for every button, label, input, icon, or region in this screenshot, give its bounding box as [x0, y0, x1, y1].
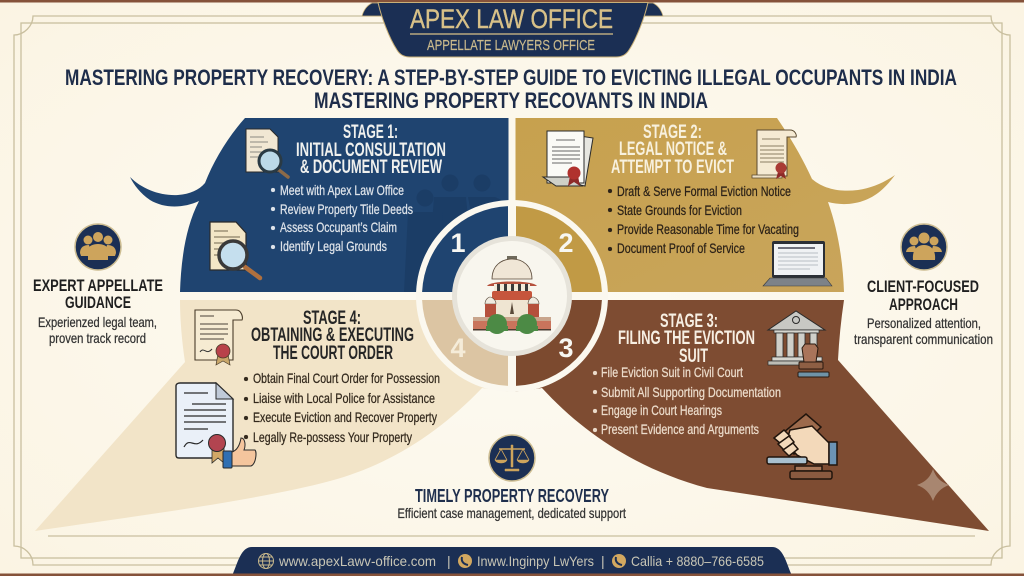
footer contact bar [233, 547, 791, 574]
stage 2 bullets: Document Proof of Service [617, 240, 745, 256]
icon: supreme court building [473, 256, 551, 334]
stage 2 heading: ATTEMPT TO EVICT [611, 157, 734, 178]
panel: stage 3 shape [516, 300, 989, 531]
icon: scroll notice (stage 2) [752, 130, 796, 179]
icon: stamp (stage 3) [798, 344, 829, 377]
stage 2 bullets: State Grounds for Eviction [617, 202, 742, 218]
stage 1 bullets: Review Property Title Deeds [280, 201, 413, 217]
icon: thumbs up (stage 4) [223, 438, 256, 468]
stage 2 heading: LEGAL NOTICE & [619, 139, 727, 160]
icon: globe [258, 554, 274, 568]
stage 4 bullets [244, 370, 440, 445]
stage 4 heading: OBTAINING & EXECUTING [251, 325, 414, 346]
title: MASTERING PROPERTY RECOVANTS IN INDIA [314, 88, 708, 113]
description: transparent communication [854, 331, 993, 347]
panel: stage 4 shape [35, 300, 508, 531]
stage 3 heading [618, 311, 755, 367]
stage 2 heading: STAGE 2: [643, 122, 702, 143]
stage 2 bullets: Provide Reasonable Time for Vacating [617, 221, 799, 237]
stage 3 bullets [593, 364, 781, 437]
stage 2 heading [611, 122, 734, 178]
description [38, 314, 157, 346]
panel: stage 1 shape [130, 118, 508, 292]
stage 4 heading [251, 308, 414, 364]
stage 3 text [593, 311, 781, 437]
stage 4 text [244, 308, 440, 445]
stage 1 bullets: Meet with Apex Law Office [280, 182, 404, 198]
icon: scales of justice [489, 435, 535, 481]
stage 2 bullets [608, 183, 799, 256]
stage 1 text [271, 122, 446, 254]
stage 1 bullets [271, 182, 413, 254]
icon: laptop (stage 2) [763, 241, 832, 286]
silhouette: legal team [404, 174, 508, 292]
icon: phone [612, 554, 626, 568]
icon: document with magnifier (stage 1 top) [246, 129, 288, 177]
heading [33, 276, 163, 312]
description: Personalized attention, [867, 315, 981, 331]
icon: sparkle [917, 469, 949, 501]
stage 2 text [608, 122, 799, 256]
stage 4 bullets: Execute Eviction and Recover Property [253, 409, 437, 425]
stage 4 bullets: Liaise with Local Police for Assistance [253, 390, 435, 406]
heading: CLIENT-FOCUSED [867, 277, 979, 296]
stage 1 bullets: Assess Occupant’s Claim [280, 219, 397, 235]
stage 4 bullets: Obtain Final Court Order for Possession [253, 370, 440, 386]
stage 1 heading [296, 122, 446, 178]
stage 4 bullets: Legally Re-possess Your Property [253, 429, 412, 445]
office name: APEX LAW OFFICE [410, 4, 613, 34]
icon: certificate scroll (stage 4) [195, 310, 242, 365]
callout: expert appellate guidance [33, 224, 163, 346]
number 2: 2 [558, 228, 574, 258]
number 3: 3 [558, 333, 574, 363]
description [854, 315, 993, 347]
heading [867, 277, 979, 314]
number 1: 1 [450, 228, 466, 258]
icon: courthouse (stage 3) [768, 311, 825, 365]
description: Efficient case management, dedicated support [398, 505, 626, 521]
icon: phone [458, 554, 472, 568]
stage 1 bullets: Identify Legal Grounds [280, 238, 387, 254]
number 4: 4 [450, 333, 466, 363]
stage 3 bullets: Present Evidence and Arguments [601, 421, 759, 437]
banner shape [378, 2, 648, 57]
title [65, 65, 957, 113]
office subtitle: APPELLATE LAWYERS OFFICE [427, 37, 595, 54]
panel: stage 2 shape [516, 118, 895, 292]
stage 1 heading: INITIAL CONSULTATION [296, 140, 446, 161]
heading: APPROACH [889, 295, 958, 314]
stage 3 bullets: Submit All Supporting Documentation [601, 384, 781, 400]
stage 3 heading: STAGE 3: [660, 311, 718, 332]
stage 3 bullets: File Eviction Suit in Civil Court [601, 364, 743, 380]
heading: TIMELY PROPERTY RECOVERY [415, 486, 609, 506]
stage 3 bullets: Engage in Court Hearings [601, 402, 722, 418]
stage 3 heading: FILING THE EVICTION [618, 328, 755, 349]
stage 4 heading: STAGE 4: [303, 308, 361, 329]
icon: notice papers with seal (stage 2) [543, 131, 593, 186]
quadrant 2 [516, 206, 602, 292]
footer contact bar: | [447, 553, 451, 569]
stage 3 heading: SUIT [679, 346, 708, 367]
stage 1 heading: STAGE 1: [343, 122, 398, 143]
social handle: Inww.Inginpy LwYers [477, 553, 594, 569]
heading: EXPERT APPELLATE [33, 276, 163, 295]
phone number: Callia + 8880–766-6585 [631, 553, 764, 569]
description: proven track record [49, 330, 146, 346]
heading: GUIDANCE [65, 293, 131, 312]
footer contact bar: | [601, 553, 605, 569]
icon: client group [901, 224, 947, 270]
banner side tabs [362, 3, 663, 16]
icon: legal team [75, 224, 121, 270]
callout: client-focused approach [854, 224, 993, 347]
callout: timely property recovery [398, 435, 626, 521]
quadrant 3 [516, 300, 602, 386]
center hub with numbered quadrants [416, 200, 608, 392]
stage 1 heading: & DOCUMENT REVIEW [300, 157, 442, 178]
quadrant 4 [422, 300, 508, 386]
stage 2 bullets: Draft & Serve Formal Eviction Notice [617, 183, 791, 199]
icon: document with magnifier (stage 1 lower) [210, 222, 260, 278]
website: www.apexLawv-office.com [278, 553, 436, 569]
icon: hand with gavel (stage 3) [767, 414, 837, 479]
header banner [362, 2, 663, 57]
icon: signed document (stage 4) [176, 383, 233, 463]
quadrant 1 [422, 206, 508, 292]
description: Experienzed legal team, [38, 314, 157, 330]
stage 4 heading: THE COURT ORDER [273, 343, 393, 364]
